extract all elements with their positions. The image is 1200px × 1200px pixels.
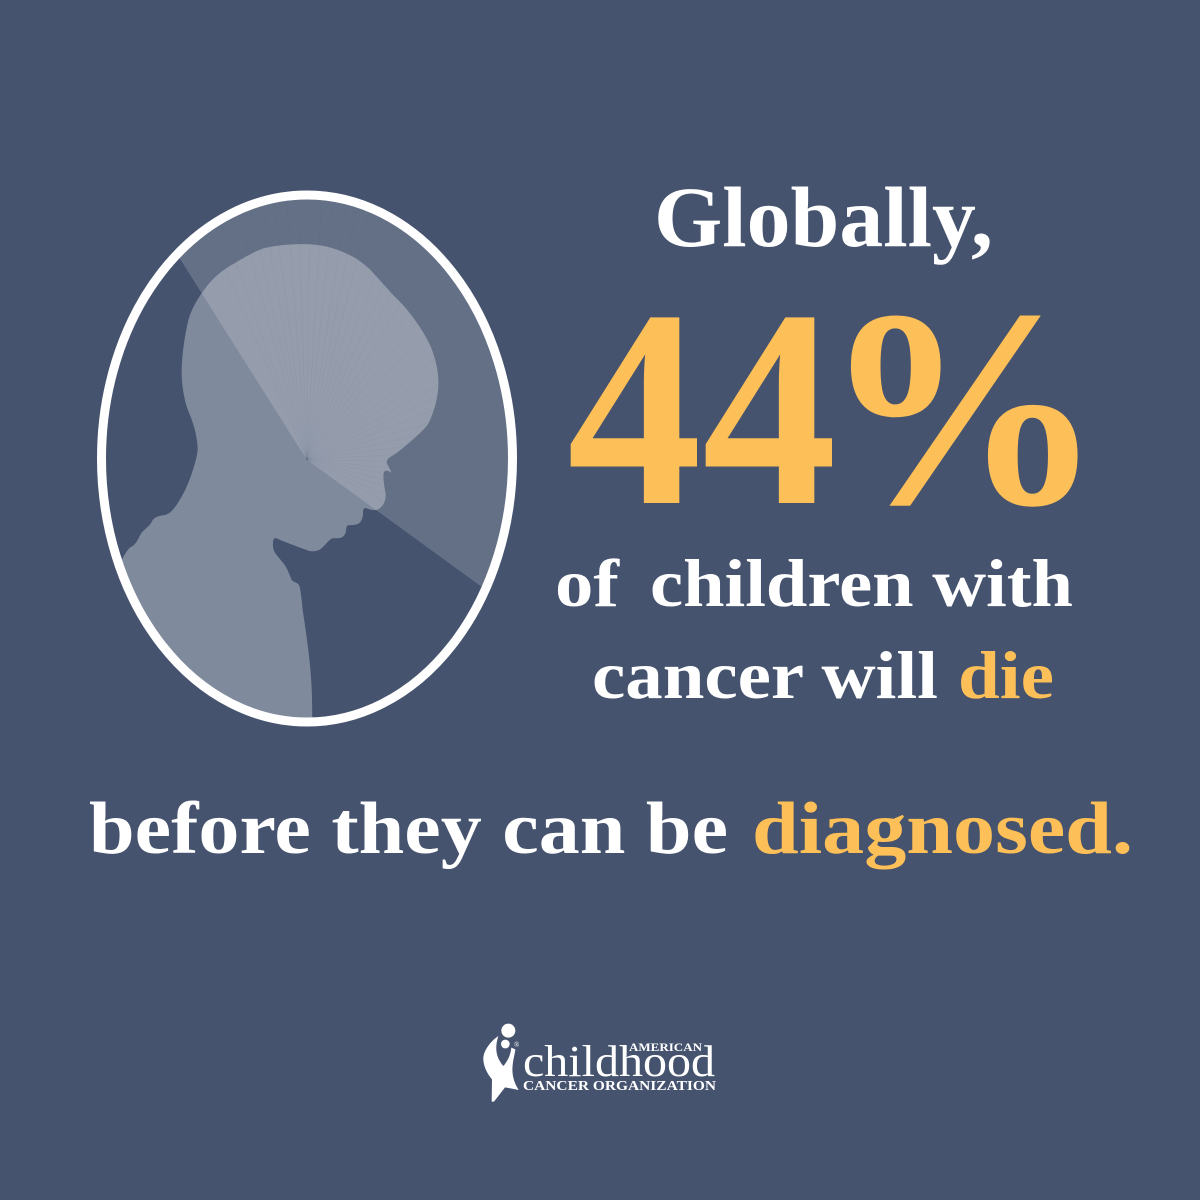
child profile silhouette [122,244,438,718]
light ray fan from head [180,200,508,586]
icon: logo figure [483,1024,519,1102]
text: childhood: childhood [523,1037,715,1086]
statistic: 44%: % [822,252,1104,564]
heading: Globally: Globally, [654,169,993,265]
text: Cancer Organization: CANCER ORGANIZATION [523,1078,716,1093]
white oval frame [102,195,512,722]
text: cancer will die: die [958,637,1054,713]
illustration: child silhouette in oval frame [97,190,517,726]
text: American: AMERICAN [629,1042,703,1054]
text: of children with: children with [650,545,1073,621]
text: before they can be diagnosed: diagnosed. [752,788,1133,870]
text: cancer will die: cancer will [592,637,938,713]
text: before they can be diagnosed: before they can be [89,788,728,870]
text: registered mark: ® [514,1041,520,1049]
statistic: 44%: 44 [567,252,837,564]
text: of children with: of [555,545,621,621]
logo: American Childhood Cancer Organization [483,1024,716,1102]
